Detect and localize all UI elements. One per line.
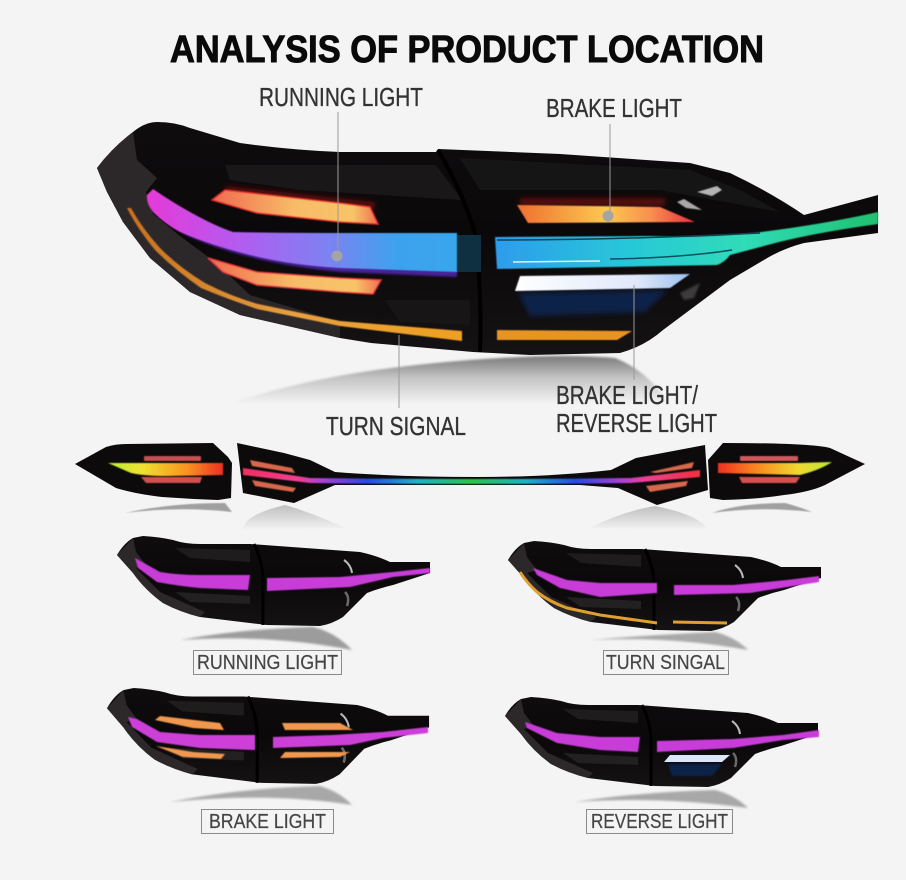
left outer lamp xyxy=(75,443,232,500)
red top bar xyxy=(144,456,201,461)
lamp xyxy=(508,541,821,631)
leader: brake light xyxy=(602,124,614,222)
gradient strip xyxy=(108,463,223,476)
upper left brake bar xyxy=(212,190,378,224)
gloss highlights xyxy=(518,186,722,316)
variant: running light xyxy=(117,536,430,674)
gradient strip xyxy=(718,462,832,475)
upper right brake bar xyxy=(517,205,695,223)
strip inner lines xyxy=(497,233,760,262)
left strip shadow xyxy=(180,232,457,277)
lamp housing xyxy=(97,122,878,355)
light strips xyxy=(128,717,428,750)
red glow above brake bars xyxy=(225,186,665,210)
reverse white bar xyxy=(515,274,690,291)
red bottom bar xyxy=(739,477,800,483)
label box: BRAKE LIGHT xyxy=(209,811,326,833)
label: brake light / reverse light xyxy=(556,380,717,438)
grey left rim xyxy=(97,132,340,338)
right light strip xyxy=(495,212,878,269)
right salmon bars xyxy=(646,462,694,492)
left salmon bars xyxy=(250,460,296,492)
red top bar xyxy=(740,456,798,461)
row reflections xyxy=(125,503,812,530)
light strips xyxy=(533,568,819,597)
label: turn signal: TURN SIGNAL xyxy=(326,411,466,441)
light strips xyxy=(525,722,819,752)
right amber turn strip xyxy=(497,330,632,340)
lamp xyxy=(117,536,430,626)
variant: turn signal xyxy=(508,541,821,674)
lower body gloss xyxy=(385,300,470,325)
lower left brake bar xyxy=(208,258,381,294)
label: brake light: BRAKE LIGHT xyxy=(546,93,682,123)
red bottom bar xyxy=(141,477,202,483)
label: brake light / reverse light: REVERSE LIGHT xyxy=(556,408,717,438)
left amber turn strip xyxy=(127,208,462,341)
reflection xyxy=(180,627,352,650)
full lamp set row xyxy=(75,443,865,530)
floor reflection xyxy=(230,356,668,404)
center trunk lamp xyxy=(237,443,708,505)
reverse blue glow xyxy=(668,764,722,776)
lamp seam xyxy=(438,150,480,352)
variant: reverse light xyxy=(505,697,819,834)
leader: running light xyxy=(332,112,342,262)
reverse white bar xyxy=(664,755,730,762)
rainbow strip xyxy=(243,468,700,484)
light strips xyxy=(135,558,430,591)
amber turn strips xyxy=(520,572,727,623)
main tail light illustration xyxy=(97,122,878,404)
right upper gloss xyxy=(460,158,780,212)
brake bars xyxy=(155,716,353,759)
reflection xyxy=(590,632,748,650)
left light strip xyxy=(147,189,457,272)
reflection xyxy=(575,790,748,808)
label box: RUNNING LIGHT xyxy=(197,652,338,674)
label: brake light / reverse light: BRAKE LIGHT/ xyxy=(556,380,699,410)
right outer lamp xyxy=(708,443,865,500)
label box: REVERSE LIGHT xyxy=(591,811,728,833)
lamp xyxy=(107,688,429,784)
reflection xyxy=(170,786,352,805)
lamp xyxy=(505,697,818,787)
title: ANALYSIS OF PRODUCT LOCATION xyxy=(170,29,764,71)
label: running light: RUNNING LIGHT xyxy=(259,82,423,112)
leader: brake and reverse light xyxy=(633,285,635,380)
seam teal glow xyxy=(457,235,481,272)
upper black pocket gloss xyxy=(225,165,462,200)
label box: TURN SINGAL xyxy=(606,652,725,674)
variant: brake light xyxy=(107,688,429,834)
leader: turn signal xyxy=(398,335,400,408)
